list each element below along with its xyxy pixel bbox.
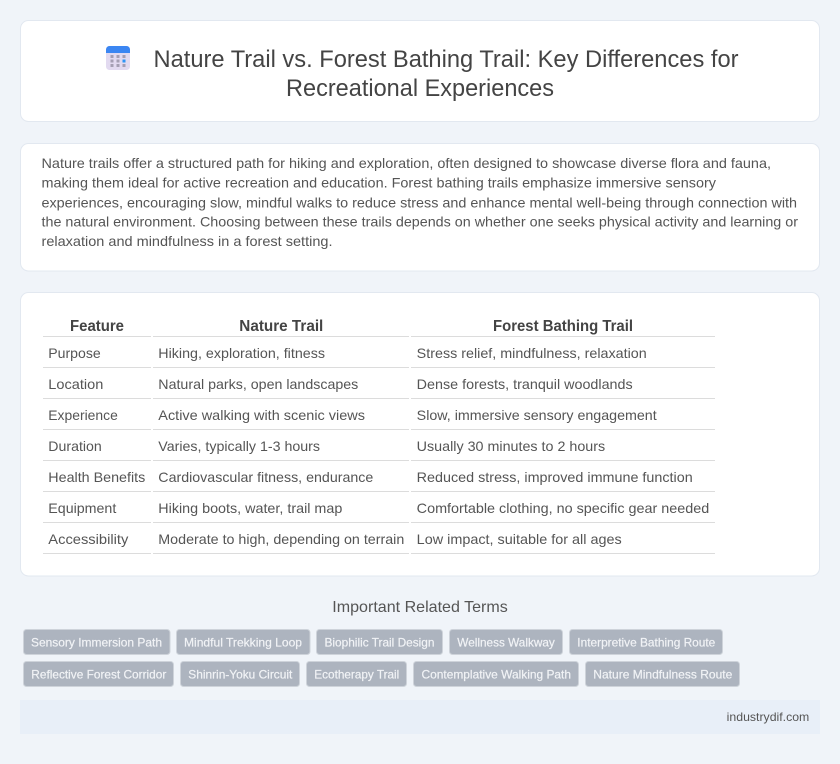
panel: comparison table bbox=[20, 292, 820, 576]
row: health benefits: Reduced stress, improved immune function bbox=[417, 469, 693, 485]
tags: related terms: Biophilic Trail Design bbox=[324, 636, 434, 650]
panel: title header bbox=[20, 20, 820, 122]
title: Nature Trail vs. Forest Bathing Trail: Key Differences for bbox=[154, 46, 739, 73]
table header row: Nature Trail bbox=[239, 318, 323, 335]
text block: introduction paragraph: Nature trails offer a structured path for hiking and exploration, often designed to showcase diverse flora and fauna, bbox=[42, 155, 771, 171]
table header row bbox=[70, 318, 633, 335]
text block: introduction paragraph: the natural environment. Choosing between these trails depends on whether one seeks physical activity and learning or bbox=[42, 214, 798, 230]
row: health benefits bbox=[48, 469, 693, 485]
row: equipment: Comfortable clothing, no specific gear needed bbox=[417, 500, 709, 516]
text block: introduction paragraph bbox=[42, 155, 798, 249]
panel: introduction bbox=[20, 144, 820, 271]
row: purpose: Purpose bbox=[48, 345, 101, 361]
row: accessibility: Moderate to high, depending on terrain bbox=[158, 531, 404, 547]
tags: related terms: Wellness Walkway bbox=[457, 636, 555, 650]
row: duration: Duration bbox=[48, 438, 102, 454]
row: location bbox=[48, 376, 633, 392]
row: accessibility: Low impact, suitable for all ages bbox=[417, 531, 622, 547]
heading: important related terms: Important Related Terms bbox=[332, 599, 508, 616]
tags: related terms: Sensory Immersion Path bbox=[31, 636, 162, 650]
title bbox=[154, 46, 739, 102]
row: purpose bbox=[48, 345, 647, 361]
row: location: Natural parks, open landscapes bbox=[158, 376, 358, 392]
title: Recreational Experiences bbox=[286, 75, 554, 102]
row: equipment: Hiking boots, water, trail map bbox=[158, 500, 343, 516]
row: experience: Slow, immersive sensory engagement bbox=[417, 407, 657, 423]
tags: related terms: Contemplative Walking Path bbox=[422, 668, 571, 682]
row: accessibility: Accessibility bbox=[48, 531, 128, 547]
row: duration: Usually 30 minutes to 2 hours bbox=[417, 438, 605, 454]
text block: introduction paragraph: experiences, encouraging slow, mindful walks to reduce stress and enhance mental well-being through connection with bbox=[42, 194, 797, 210]
row: equipment: Equipment bbox=[48, 500, 116, 516]
row: equipment bbox=[48, 500, 709, 516]
row: duration bbox=[48, 438, 605, 454]
text block: introduction paragraph: relaxation and mindfulness in a forest setting. bbox=[42, 233, 332, 249]
row: purpose: Stress relief, mindfulness, relaxation bbox=[417, 345, 647, 361]
table header row: Feature bbox=[70, 318, 124, 335]
table header row: Forest Bathing Trail bbox=[493, 318, 633, 335]
footer bar bbox=[20, 700, 820, 734]
tags: related terms: Ecotherapy Trail bbox=[314, 668, 399, 682]
row: purpose: Hiking, exploration, fitness bbox=[158, 345, 325, 361]
row: experience: Experience bbox=[48, 407, 118, 423]
footer bar: industrydif.com bbox=[727, 710, 809, 724]
row: duration: Varies, typically 1-3 hours bbox=[158, 438, 320, 454]
row: location: Location bbox=[48, 376, 103, 392]
icon: calendar bbox=[106, 46, 130, 70]
tags: related terms: Mindful Trekking Loop bbox=[184, 636, 302, 650]
tags: related terms bbox=[24, 630, 740, 686]
row: experience: Active walking with scenic views bbox=[158, 407, 365, 423]
tags: related terms: Interpretive Bathing Route bbox=[577, 636, 716, 650]
tags: related terms: Reflective Forest Corridor bbox=[31, 668, 166, 682]
row: health benefits: Cardiovascular fitness, endurance bbox=[158, 469, 374, 485]
row: health benefits: Health Benefits bbox=[48, 469, 145, 485]
tags: related terms: Nature Mindfulness Route bbox=[593, 668, 733, 682]
row: location: Dense forests, tranquil woodlands bbox=[417, 376, 633, 392]
row: experience bbox=[48, 407, 657, 423]
text block: introduction paragraph: making them ideal for active recreation and education. Forest bathing trails emphasize immersive sensory bbox=[42, 174, 716, 190]
row: accessibility bbox=[48, 531, 622, 547]
tags: related terms: Shinrin-Yoku Circuit bbox=[188, 668, 293, 682]
